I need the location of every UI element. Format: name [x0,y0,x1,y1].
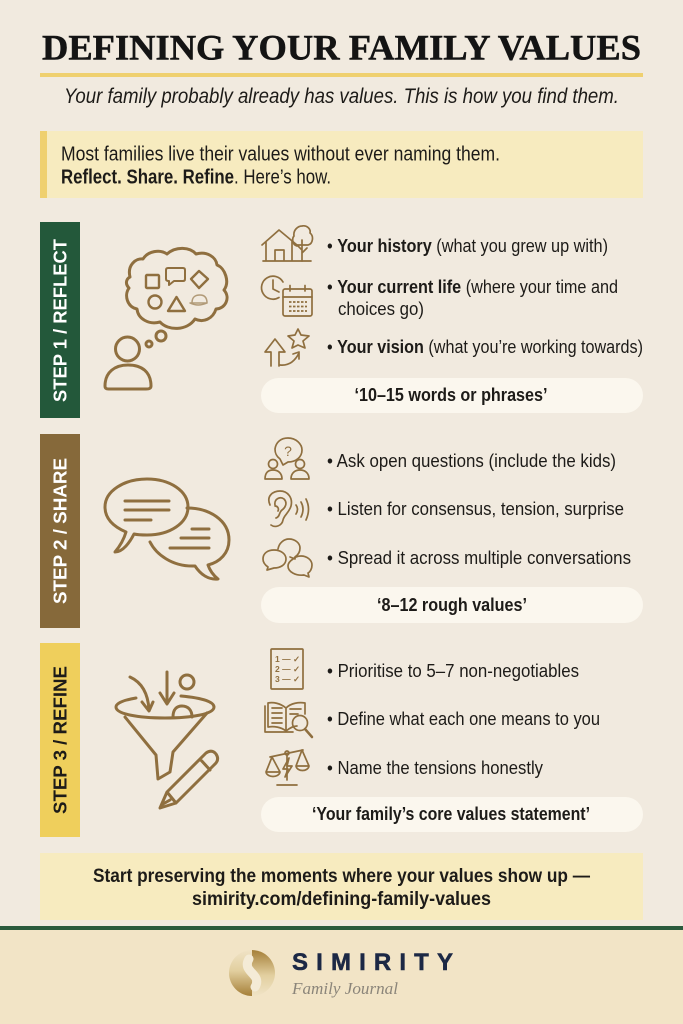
call to action: simirity.com/defining-family-values [192,889,491,910]
bullet: current life [327,277,618,319]
icon: people with question: ? [284,443,292,459]
bullet: open questions: • Ask open questions (include the kids) [327,451,616,471]
icon: funnel and pencil [116,672,218,808]
brand name: SIMIRITY [292,949,453,976]
outcome pill 3 [261,797,643,832]
icon: numbered checklist: 3 — ✓ [275,674,300,684]
icon: person thinking cloud [105,248,227,389]
icon: arrows and star [265,329,309,366]
icon: numbered checklist: 2 — ✓ [275,664,300,674]
bullet: current life: choices go) [338,299,424,319]
footer [0,926,683,1024]
step 2 label [40,434,80,628]
bullet: history: • Your history (what you grew up with) [327,236,608,256]
outcome pill 3: ‘Your family’s core values statement’ [312,804,590,824]
call to action [40,853,643,920]
icon: people with question [265,438,309,479]
bullet: tensions: • Name the tensions honestly [327,758,543,778]
icon: house and tree [262,226,312,261]
icon: ear and sound [269,491,308,526]
icon: numbered checklist: 1 — ✓ [275,654,300,664]
bullet: current life: • Your current life (where your time and [327,277,618,297]
bullet: prioritise: • Prioritise to 5–7 non-negotiables [327,661,579,681]
icon: book and magnifier [265,703,312,737]
logo mark [229,950,275,996]
panel: step 3 refine [40,643,643,837]
outcome pill 1 [261,378,643,413]
step 3 label [40,643,80,837]
tagline: Family Journal [291,979,398,998]
step 1 label [40,222,80,418]
icon: clock and calendar [262,276,312,316]
call to action: Start preserving the moments where your values show up — [93,866,590,887]
outcome pill 2 [261,587,643,623]
bullet: define: • Define what each one means to you [327,709,600,729]
bullet: conversations: • Spread it across multiple conversations [327,548,631,568]
icon: numbered checklist [271,649,303,689]
bullet: vision: • Your vision (what you’re working towards) [327,337,643,357]
title: DEFINING YOUR FAMILY VALUES [42,28,641,68]
step 1 label: STEP 1 / REFLECT [50,239,70,402]
outcome pill 2: ‘8–12 rough values’ [377,595,527,615]
subtitle: Your family probably already has values. This is how you find them. [64,85,619,108]
intro callout: Reflect. Share. Refine. Here’s how. [61,166,331,188]
panel: step 2 share [40,434,643,628]
intro callout: Most families live their values without ever naming them. [61,144,500,166]
bullet: listen: • Listen for consensus, tension, surprise [327,499,624,519]
step 3 label: STEP 3 / REFINE [50,666,70,814]
step 2 label: STEP 2 / SHARE [50,458,70,604]
icon: speech bubbles [105,479,229,579]
icon: scales with lightning [266,750,309,785]
panel: step 1 reflect [40,222,643,418]
icon: three conversation bubbles [263,539,312,577]
outcome pill 1: ‘10–15 words or phrases’ [354,385,548,405]
intro callout [40,131,643,198]
